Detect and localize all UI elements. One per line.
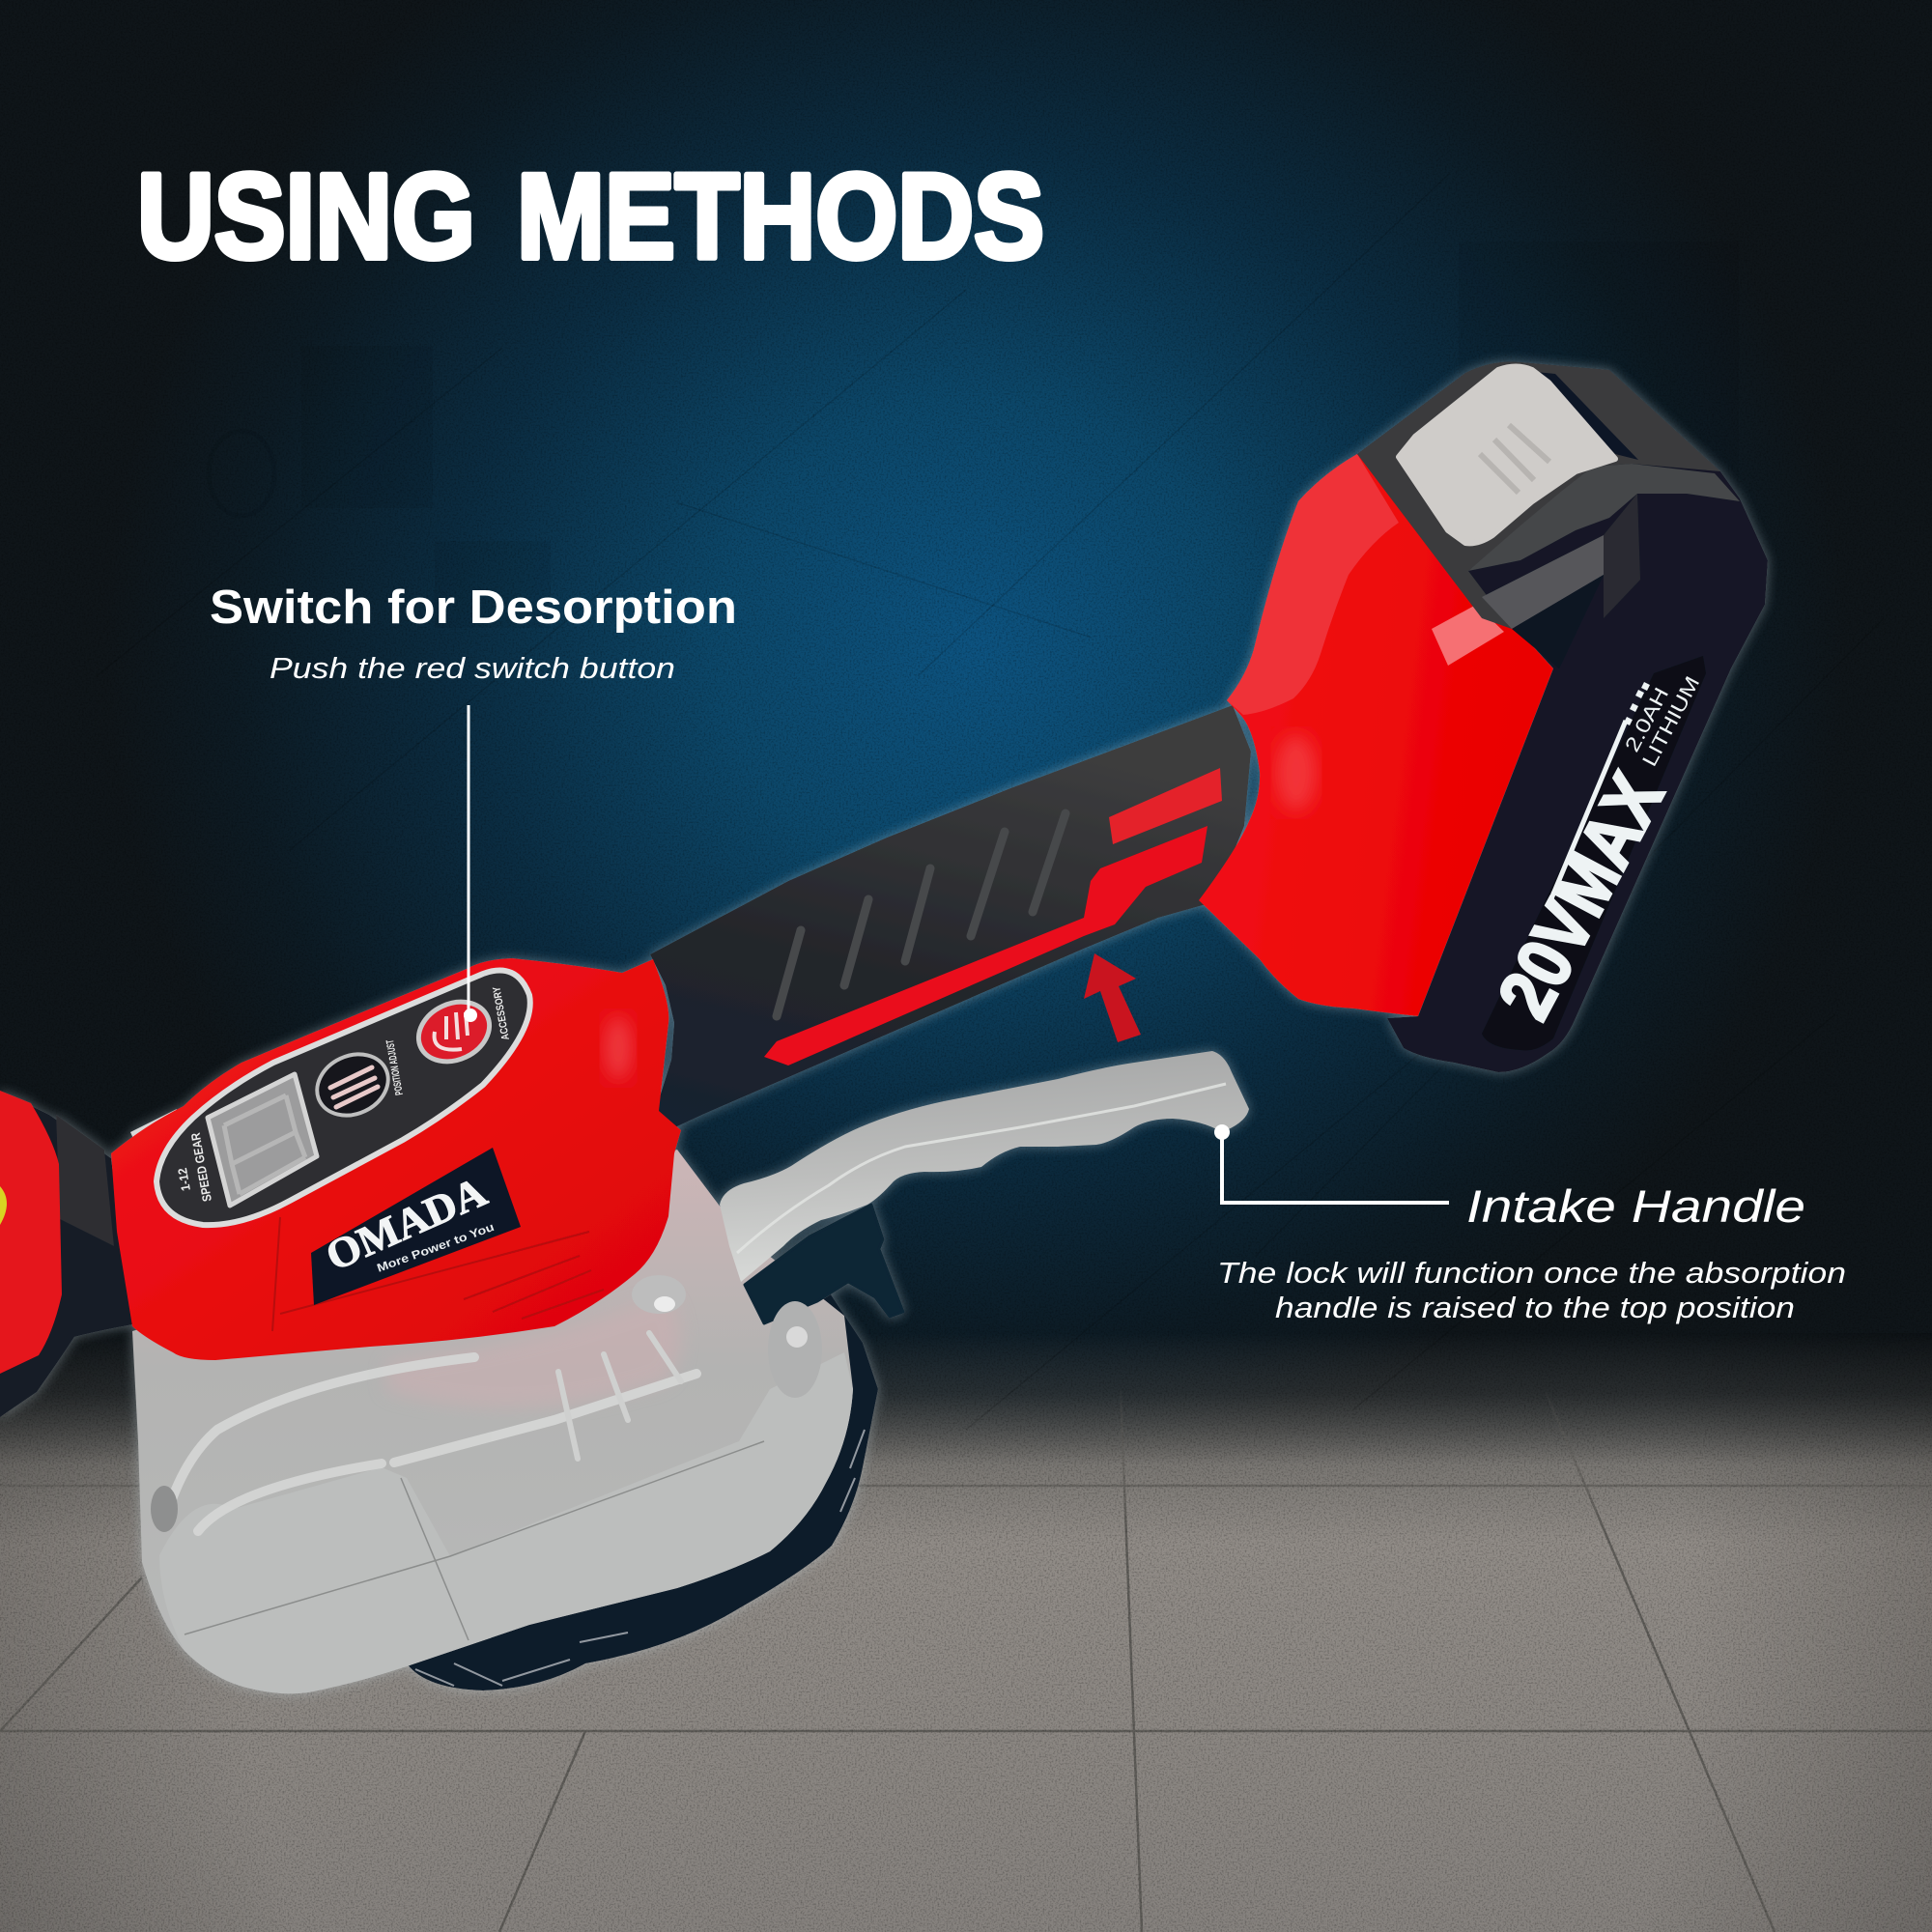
digital speed display	[208, 1074, 317, 1206]
red desorption switch button	[409, 991, 499, 1072]
grey battery release button	[1399, 367, 1615, 543]
leader line and dot	[1214, 1124, 1449, 1203]
OMADA brand plate: OMADA	[319, 1168, 494, 1280]
OMADA brand plate: More Power to You	[375, 1220, 496, 1275]
callout description: The lock will function once the absorption	[1217, 1256, 1846, 1290]
red main body	[111, 958, 681, 1360]
battery 20V MAX text: 2.0AH	[1621, 684, 1673, 755]
black lower ring with wrap	[407, 1294, 878, 1690]
callout description	[1217, 1256, 1846, 1324]
panel labels: POSITION ADJUST	[384, 1038, 406, 1096]
battery pack	[1357, 361, 1768, 1072]
dark grip	[650, 705, 1251, 1127]
leader line and dot	[464, 705, 477, 1022]
black lock clip	[745, 1205, 903, 1323]
mounting post	[768, 1301, 822, 1398]
battery 20V MAX text: LITHIUM	[1638, 672, 1704, 770]
red grip stripe	[764, 826, 1208, 1065]
callout: intake handle	[1214, 1124, 1846, 1324]
left neighbouring red section	[0, 1091, 133, 1417]
title: METHODS	[517, 150, 1044, 284]
panel labels: 1-12	[175, 1167, 193, 1192]
gear selector button	[307, 1043, 398, 1126]
red tail end	[1199, 454, 1553, 1016]
title	[137, 150, 1044, 284]
callout description: handle is raised to the top position	[1275, 1291, 1795, 1324]
intake handle	[720, 1051, 1249, 1282]
battery 20V MAX text: 20VMAX	[1481, 760, 1680, 1032]
OMADA brand plate	[311, 1148, 521, 1305]
product: electric tile tool	[0, 361, 1768, 1693]
textured grey wedge	[1468, 464, 1740, 571]
callout description: Push the red switch button	[270, 651, 675, 685]
callout: switch for desorption	[210, 582, 737, 1022]
panel labels	[175, 985, 512, 1203]
red arrow pointing to handle	[1084, 953, 1141, 1042]
silver motor housing	[130, 1109, 853, 1693]
callout heading: Intake Handle	[1466, 1180, 1805, 1232]
battery label plate	[1482, 656, 1706, 1051]
red upper grip slot	[1109, 768, 1222, 844]
callout heading: Switch for Desorption	[210, 582, 737, 634]
panel labels: ACCESSORY	[491, 985, 512, 1041]
panel labels: SPEED GEAR	[188, 1131, 214, 1203]
control panel oval	[156, 970, 530, 1225]
title: USING	[137, 150, 475, 284]
